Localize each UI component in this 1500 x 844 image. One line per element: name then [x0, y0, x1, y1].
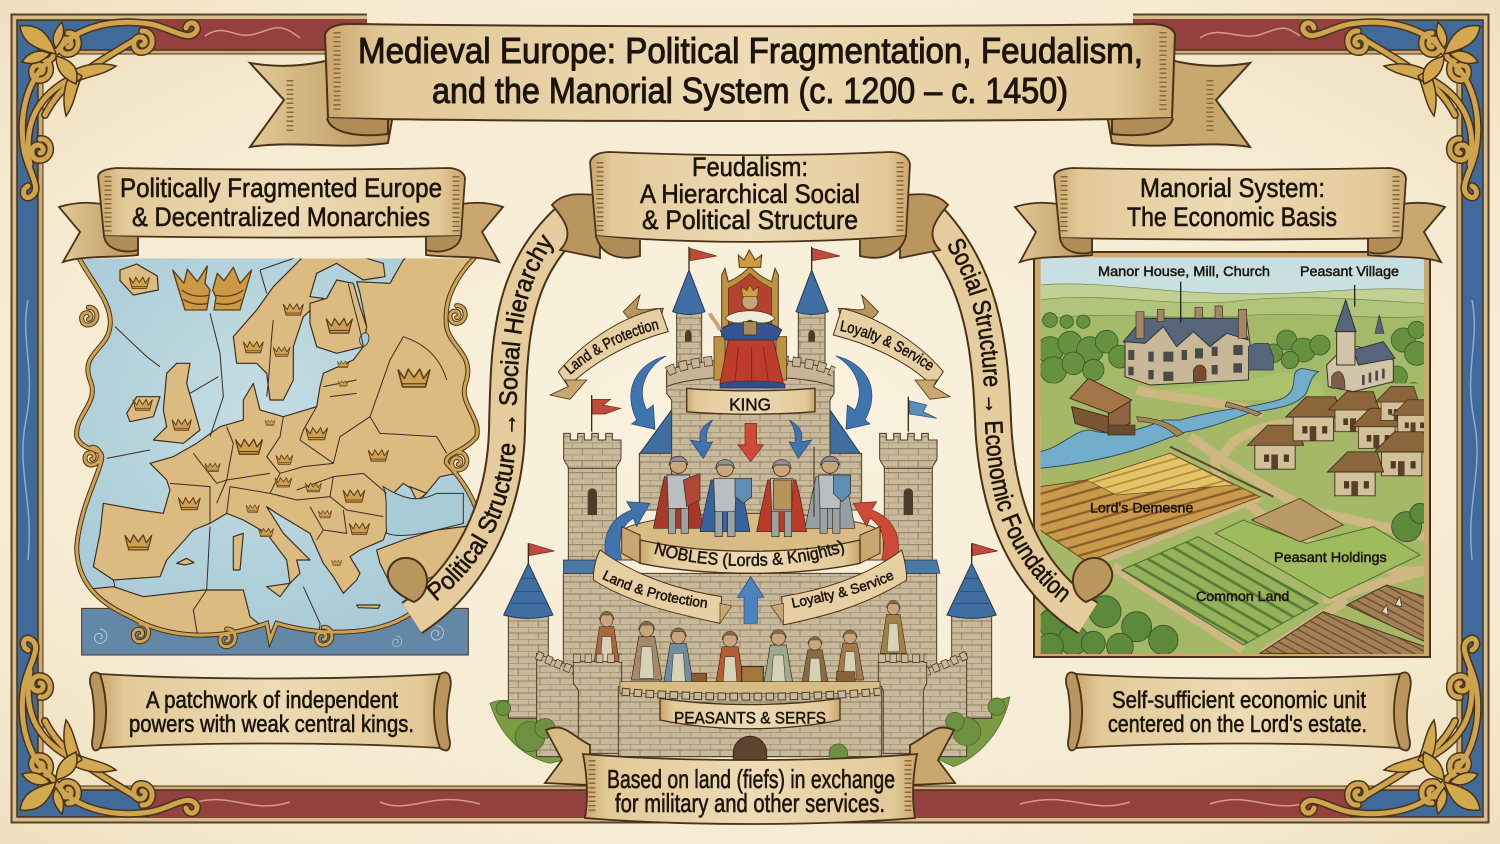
caption scroll: right: Self-sufficient economic unit — [1112, 687, 1366, 714]
central keep — [667, 370, 834, 533]
corner flourish: bottom left — [20, 638, 197, 814]
map heading — [120, 173, 442, 232]
village yard — [1252, 498, 1343, 542]
caption scroll: right — [1066, 672, 1411, 750]
ribbon: land and protection lower: Land & Protection — [602, 570, 707, 608]
ribbon: political structure to social hierarchy — [386, 208, 566, 634]
hills — [1040, 284, 1425, 417]
label: peasant holdings: Peasant Holdings — [1274, 549, 1387, 565]
peasants at work — [593, 600, 906, 690]
panel: feudal castle pyramid — [452, 206, 1050, 788]
manorial banner — [1015, 168, 1445, 262]
ribbon: land and protection upper — [548, 294, 669, 400]
feudalism heading: & Political Structure — [642, 205, 858, 235]
king banner: KING — [729, 395, 771, 415]
dirt paths — [1087, 390, 1425, 653]
blue up arrow — [737, 577, 764, 623]
map gold frame — [77, 258, 483, 647]
courtyard platform — [618, 513, 883, 560]
top towers — [673, 247, 840, 367]
caption scroll: bottom centre — [545, 728, 955, 824]
church — [1327, 300, 1395, 392]
label: manor house, mill, church: Manor House, Mill, Church — [1098, 263, 1270, 279]
feudalism heading — [640, 152, 860, 235]
feudalism heading: Feudalism: — [692, 152, 808, 182]
manorial heading: The Economic Basis — [1127, 202, 1337, 232]
ribbon: social structure to economic foundation — [932, 209, 1114, 634]
caption scroll: left — [90, 672, 451, 750]
ribbon: social structure to economic foundation: Social Structure → Economic Foundation — [948, 238, 1069, 603]
feudalism heading: A Hierarchical Social — [640, 179, 860, 209]
red curved arrow: lower right — [853, 502, 898, 560]
side towers — [564, 395, 937, 562]
front towers — [573, 658, 927, 757]
panel: manor estate scene — [1034, 252, 1435, 660]
nobles banner: NOBLES (Lords & Knights) — [654, 540, 844, 570]
outer wall — [537, 653, 967, 757]
small blue arrow: right — [789, 420, 812, 458]
manor house — [1123, 306, 1273, 385]
ribbon: loyalty and service upper — [832, 294, 952, 400]
ribbon: land and protection upper: Land & Protection — [564, 321, 659, 375]
panel: map of Europe — [70, 240, 490, 660]
castle gate — [733, 736, 767, 760]
bushes — [496, 698, 1005, 763]
corner towers — [504, 543, 998, 718]
leader lines — [1181, 282, 1355, 323]
caption scroll: left: powers with weak central kings. — [129, 711, 414, 738]
map banner — [59, 168, 503, 262]
title banner — [250, 24, 1250, 147]
hill greenery — [490, 697, 1010, 767]
upper castle: king and nobles — [510, 212, 990, 602]
kingdom crowns — [125, 277, 430, 566]
big blue arrow: right — [836, 356, 872, 429]
map ornament band — [82, 608, 468, 655]
broken crown — [173, 266, 252, 310]
knights — [653, 447, 855, 537]
field: peasant holdings — [1215, 520, 1420, 598]
label: peasant village: Peasant Village — [1300, 263, 1399, 279]
ribbon: loyalty and service upper: Loyalty & Service — [840, 320, 933, 370]
water mill — [1070, 378, 1135, 435]
treeline — [1040, 312, 1424, 384]
corner flourish: top left — [20, 22, 197, 198]
ribbon: loyalty and service lower: Loyalty & Service — [792, 572, 894, 608]
manorial heading — [1127, 173, 1337, 232]
ploughed fields — [1260, 585, 1425, 655]
corner flourish: bottom right — [1303, 638, 1480, 814]
title text: and the Manorial System (c. 1200 – c. 1450) — [432, 70, 1068, 111]
big blue arrow: left — [631, 356, 666, 429]
caption scroll: bottom centre: for military and other services. — [615, 788, 885, 818]
hedge — [1170, 447, 1273, 497]
lower castle: peasants — [490, 526, 1010, 767]
ribbon: loyalty and service lower — [770, 549, 908, 626]
lower blue roofs — [640, 410, 860, 453]
red arrow: centre — [738, 423, 763, 462]
king on throne — [710, 250, 787, 388]
peasants ploughing — [1382, 597, 1402, 615]
river — [1040, 368, 1318, 468]
caption scroll: bottom centre: Based on land (fiefs) in exchange — [607, 764, 895, 794]
title text: Medieval Europe: Political Fragmentation, Feudalism, — [358, 30, 1143, 71]
foreground trees — [1037, 503, 1430, 660]
map heading: & Decentralized Monarchies — [132, 202, 430, 232]
caption scroll: right: centered on the Lord's estate. — [1108, 711, 1367, 738]
village cottages — [1247, 386, 1435, 496]
corner flourish: top right — [1303, 22, 1480, 198]
king banner — [687, 388, 815, 415]
label: common land: Common Land — [1196, 588, 1289, 604]
inner courtyard wall — [563, 573, 937, 693]
field: lord's demesne — [1040, 453, 1260, 562]
label: lord's demesne: Lord's Demesne — [1090, 500, 1194, 516]
feudalism banner — [552, 152, 948, 258]
field: common land — [1122, 537, 1318, 645]
bridge — [1137, 402, 1262, 437]
ribbon: political structure to social hierarchy: Political Structure → Social Hierarchy — [426, 234, 554, 601]
peasants banner — [660, 698, 840, 729]
caption scroll: left: A patchwork of independent — [146, 687, 398, 714]
sea and land — [79, 258, 475, 633]
ribbon: land and protection lower — [592, 549, 732, 624]
nobles banner — [621, 526, 880, 574]
title text — [358, 30, 1143, 111]
peasants banner: PEASANTS & SERFS — [674, 708, 826, 727]
small blue arrow: left — [690, 420, 713, 458]
map heading: Politically Fragmented Europe — [120, 173, 442, 203]
manorial heading: Manorial System: — [1140, 173, 1325, 203]
blue curved arrow: lower left — [605, 502, 650, 560]
